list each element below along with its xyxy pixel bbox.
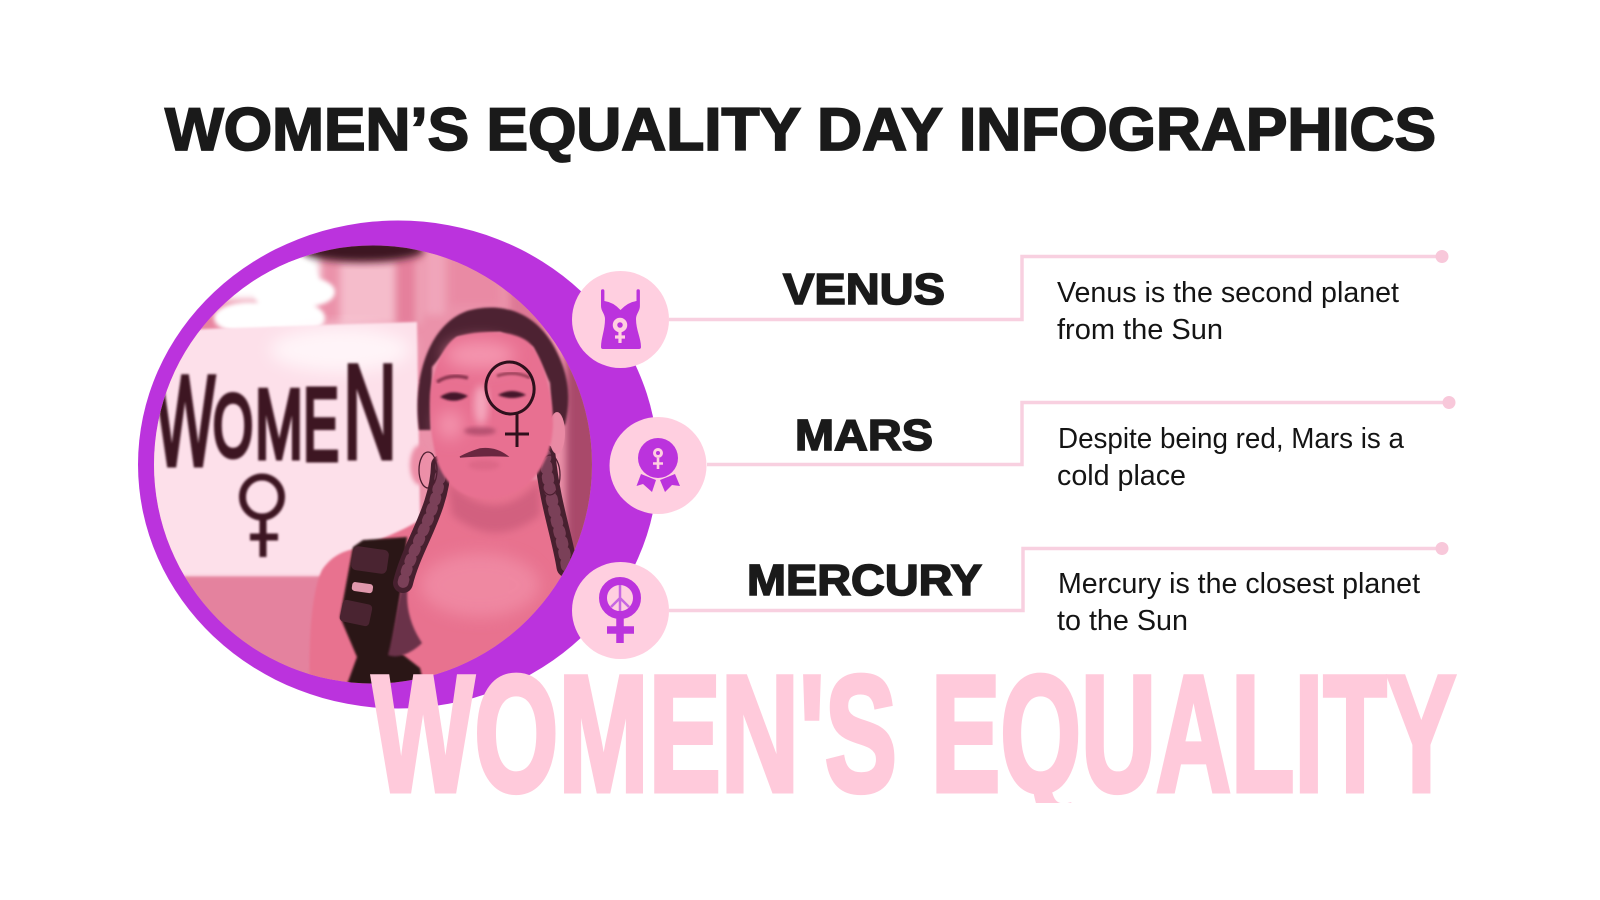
sign board <box>140 322 420 577</box>
text: Venus description: Venus is the second planet <box>1057 277 1399 309</box>
hair <box>417 307 568 430</box>
white blob <box>214 255 335 334</box>
label: Venus: VENUS <box>783 265 945 314</box>
large watermark text <box>370 672 1457 803</box>
strap light patch <box>351 582 373 593</box>
forehead and cheek highlights <box>438 341 515 439</box>
lower background <box>184 574 333 680</box>
hair wisp <box>388 580 422 656</box>
photo: protester with WOMEN sign <box>140 238 600 700</box>
ear <box>550 412 565 454</box>
hoop earrings <box>419 452 560 495</box>
sign highlight <box>270 328 410 372</box>
pink patch beside hair <box>408 443 421 487</box>
arm and chest <box>310 480 574 684</box>
facial features <box>437 373 530 470</box>
sign lettering: N <box>343 338 397 487</box>
icon: dress with female symbol <box>572 271 669 368</box>
text: Mercury description: to the Sun <box>1057 605 1188 637</box>
connector: Mercury <box>669 542 1448 610</box>
label: Mars: MARS <box>795 411 933 460</box>
strap buckles <box>339 546 389 627</box>
face <box>430 332 553 498</box>
cheek female symbol <box>484 360 536 447</box>
chest highlight <box>420 553 540 617</box>
label: Mercury: MERCURY <box>747 556 982 605</box>
text: Venus description: from the Sun <box>1057 314 1223 346</box>
purple ellipse behind photo <box>138 220 658 708</box>
sign lettering: W <box>155 350 215 493</box>
sign lettering: M <box>255 369 303 479</box>
icon: medal with female symbol <box>610 417 706 514</box>
connector: Mars <box>707 396 1456 464</box>
dark blur at top <box>300 238 424 262</box>
sign lettering: E <box>303 367 339 482</box>
text: Mars description: cold place <box>1057 460 1186 492</box>
sign female symbol <box>242 477 282 557</box>
text: Mars description: Despite being red, Mars is a <box>1058 423 1405 455</box>
neck shadow <box>447 480 540 532</box>
connector: Venus <box>669 250 1448 320</box>
tank top and backpack strap <box>340 537 425 690</box>
icon: female symbol with peace sign <box>572 562 669 659</box>
large watermark text: WOMEN'S <box>372 642 897 827</box>
sign lettering: O <box>213 376 253 475</box>
text: Mercury description: Mercury is the closest planet <box>1058 568 1420 600</box>
braids <box>403 455 567 583</box>
photo background, upper area <box>201 252 592 558</box>
title: WOMEN’S EQUALITY DAY INFOGRAPHICS <box>165 96 1436 163</box>
